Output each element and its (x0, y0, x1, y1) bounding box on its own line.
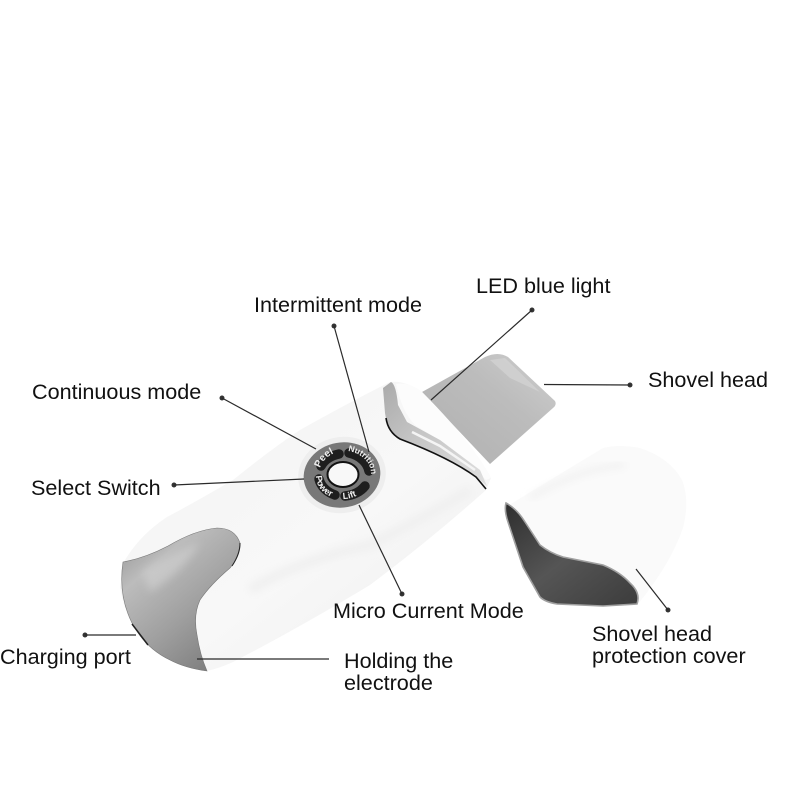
label: Holding the electrode (197, 648, 453, 695)
label: Shovel head (544, 367, 768, 392)
label: Shovel head protection cover: Shovel head (592, 621, 712, 646)
label: Micro Current Mode: Micro Current Mode (333, 598, 524, 623)
label: Select Switch: Select Switch (31, 475, 161, 500)
head cap white (396, 384, 491, 480)
thumb grip (122, 528, 240, 671)
label: Holding the electrode: electrode (344, 670, 433, 695)
cover opening (505, 503, 638, 606)
device: scrubber (120, 354, 556, 672)
label: Charging port: Charging port (0, 644, 131, 669)
label: Select Switch (31, 475, 304, 500)
head band detail (383, 382, 487, 489)
control dial: Nutrition (348, 445, 376, 474)
label: Continuous mode: Continuous mode (32, 379, 201, 404)
device body (120, 382, 491, 671)
label: Charging port (0, 632, 136, 669)
label: Shovel head: Shovel head (648, 367, 768, 392)
control dial (298, 437, 386, 513)
protection cover (505, 446, 686, 606)
label: Intermittent mode (254, 292, 422, 452)
control dial: Lift (343, 490, 356, 500)
label: Shovel head protection cover: protection cover (592, 643, 746, 668)
label: Continuous mode (32, 379, 316, 449)
label: Micro Current Mode (333, 505, 524, 623)
shovel blade (422, 354, 556, 464)
label: Intermittent mode: Intermittent mode (254, 292, 422, 317)
control dial: Peel (314, 447, 334, 468)
label: Holding the electrode: Holding the (344, 648, 453, 673)
control dial: Power (316, 476, 333, 496)
label: Shovel head protection cover (592, 569, 746, 668)
label: LED blue light: LED blue light (476, 273, 610, 298)
label: LED blue light (431, 273, 610, 400)
